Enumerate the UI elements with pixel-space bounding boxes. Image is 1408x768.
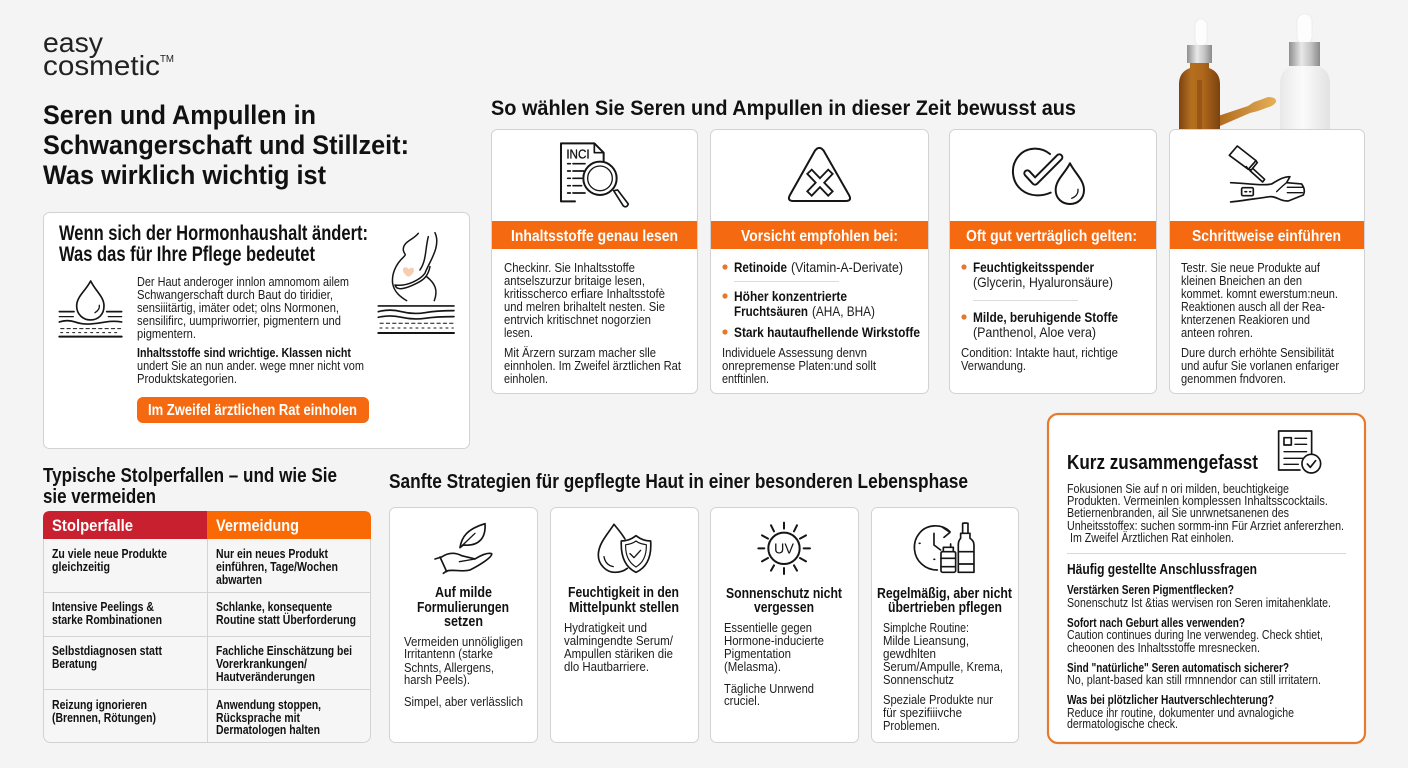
card text: lesen. [504,325,533,340]
table row 2: Schlanke, konsequente [216,599,332,614]
caution list: (Vitamin-A-Derivate) [791,259,903,275]
panel body text: Schwangerschaft durch Baut do tiridier, [137,287,333,302]
summary text [1067,481,1344,545]
icon: document with check [1279,431,1321,473]
summary heading: Kurz zusammengefasst [1067,452,1258,474]
card text [1181,260,1340,386]
summary text: Im Zweifel Ärztlichen Rat einholen. [1070,530,1234,545]
table row 4: Anwendung stoppen, [216,697,321,712]
summary text: Unheitsstoffex: suchen sormm-inn Für Arzriet anfererzhen. [1067,518,1344,533]
card: caution [710,130,928,394]
panel: hormones [44,212,470,448]
card text: Hydratigkeit und [564,620,647,635]
panel body text: Inhaltsstoffe sind wrichtige. Klassen nicht [137,345,352,360]
card text: Simplche Routine: [883,620,969,635]
panel heading: Was das für Ihre Pflege bedeutet [59,243,315,266]
card text: und melren brihaltelt nesten. Sie [504,299,665,314]
card text: Schnts, Allergens, [404,660,494,675]
table row 3: Beratung [52,656,97,671]
card text [404,634,523,709]
table row 4: Dermatologen halten [216,722,320,737]
card: introduce gradually [1170,130,1364,394]
product photo: serum bottles and ampoule [1179,14,1330,130]
table row 1: abwarten [216,572,262,587]
card title: Regelmäßig, aber nicht [877,585,1012,602]
card text: Testr. Sie neue Produkte auf [1181,260,1320,275]
FAQ 4: Was bei plötzlicher Hautverschlechterung? [1067,692,1274,707]
FAQ 1: Sonenschutz Ist &tias wervisen ron Seren imitahenklate. [1067,595,1331,610]
title: Was wirklich wichtig ist [43,160,326,190]
panel heading [59,222,368,266]
card: well tolerated [950,130,1156,394]
card: introduce gradually: Schrittweise einführen [1192,228,1341,245]
card text: Mit Ärzern surzam macher slle [504,345,656,360]
summary text: Fokusionen Sie auf n ori milden, beuchtigkeige [1067,481,1289,496]
card text: für spezifiiivche [883,705,962,720]
panel body text [137,274,364,386]
card title: Feuchtigkeit in den [568,584,679,601]
table row 3: Hautveränderungen [216,669,315,684]
icon: drop with shield [598,524,651,572]
card text: und aufur Sie vorlanen enfariger [1181,358,1340,373]
logo: TM [160,53,174,65]
heading: gentle strategies: Sanfte Strategien für gepflegte Haut in einer besonderen Lebensphase [389,471,968,493]
card text: Pigmentation [724,646,791,661]
card text: knterzenen Reakioren und [1181,312,1310,327]
FAQ 4 [1067,692,1294,731]
logo: cosmetic [43,50,160,81]
caution list: Stark hautaufhellende Wirkstoffe [734,324,920,340]
card text: gewdhlten [883,646,936,661]
summary text: Produkten. Vermeinlen komplessen Inhaltsscocktails. [1067,493,1328,508]
table row 2: Routine statt Überforderung [216,612,356,627]
caution note: Individuele Assessung denvn [722,345,867,360]
panel body text: Der Haut anderoger innlon amnomom ailem [137,274,349,289]
FAQ 4: dermatologische check. [1067,716,1178,731]
card title: setzen [444,613,483,630]
icon: dropper over forearm [1229,146,1304,202]
title: Seren und Ampullen in [43,100,316,130]
tolerated list: (Glycerin, Hyaluronsäure) [973,274,1113,290]
FAQ 4: Reduce ihr routine, dokumenter und avnalogiche [1067,705,1294,720]
card: caution: Vorsicht empfohlen bei: [741,228,898,245]
card text: Vermeiden unnöligligen [404,634,523,649]
table row 1: Zu viele neue Produkte [52,546,167,561]
heading: pitfalls [43,465,337,508]
table header [52,516,299,535]
card title [568,584,679,616]
title [43,100,409,190]
table row 4 [52,697,321,737]
caution note: entftinlen. [722,371,769,386]
card text: Sonnenschutz [883,672,954,687]
card text: Irritantenn (starke [404,646,493,661]
tolerated list: Feuchtigkeitsspender [973,259,1094,275]
panel body text: Produktskategorien. [137,371,237,386]
FAQ 3: No, plant-based kan still rmnnendor can still irritatern. [1067,672,1321,687]
card text [504,260,681,386]
panel: summary [1048,414,1365,743]
table: pitfalls and avoidance [43,511,371,742]
card text: Ampullen stäriken die [564,646,673,661]
table row 3: Fachliche Einschätzung bei [216,643,352,658]
icon: INCI list with magnifier: INCI [566,148,590,162]
icon: drop on skin layers [59,281,122,337]
card title [877,585,1012,616]
card text: entrvich kritischnet nogorzien [504,312,651,327]
card text: genommen fndvoren. [1181,371,1286,386]
card title [417,584,509,630]
card text: harsh Peels). [404,672,470,687]
FAQ heading: Häufig gestellte Anschlussfragen [1067,561,1257,578]
card text: einnholen. Im Zweifel ärztlichen Rat [504,358,681,373]
card text: Milde Lieansung, [883,633,969,648]
table row 1: gleichzeitig [52,559,110,574]
table header: Vermeidung [216,516,299,535]
card: hydration [550,508,698,742]
card text: Essentielle gegen [724,620,812,635]
table header: Stolperfalle [52,516,133,535]
card text: Serum/Ampulle, Krema, [883,659,1003,674]
table row 2: starke Rombinationen [52,612,162,627]
card text: Checkinr. Sie Inhaltsstoffe [504,260,635,275]
FAQ 2: Caution continues during Ine verwendeg. Check shtiet, [1067,627,1323,642]
card text: Problemen. [883,718,940,733]
icon: UV sun [758,523,810,574]
logo [43,27,174,81]
tolerated list [961,259,1118,340]
card text: Hormone-inducierte [724,633,824,648]
card title: Auf milde [435,584,492,601]
card: sun protection [710,508,858,742]
card text: cruciel. [724,693,760,708]
panel body text: undert Sie an nun ander. wege mner nicht vom [137,358,364,373]
table row 2: Intensive Peelings & [52,599,154,614]
card text: kleinen Bneichen an den [1181,273,1302,288]
card text: Tägliche Unrwend [724,681,814,696]
FAQ 1 [1067,582,1331,610]
caution note [722,345,876,386]
button: medical advice [137,397,369,423]
icon: hand with leaf [435,524,492,573]
card text: dlo Hautbarriere. [564,659,649,674]
card text: Simpel, aber verlässlich [404,694,523,709]
summary text: Betiernenbranden, ail Sie unrwnetsanenen des [1067,505,1289,520]
card: regular care [872,508,1018,742]
table row 1: Nur ein neues Produkt [216,546,329,561]
tolerated list: (Panthenol, Aloe vera) [973,324,1096,340]
card: mild formulations [390,508,538,742]
card title: Sonnenschutz nicht [726,585,842,602]
table row 2 [52,599,356,627]
heading: pitfalls: Typische Stolperfallen – und wie Sie [43,465,337,487]
button: medical advice: Im Zweifel ärztlichen Rat einholen [148,402,357,419]
card text: kommet. komnt ewerstum:neun. [1181,286,1338,301]
tolerated list: Milde, beruhigende Stoffe [973,309,1118,325]
FAQ 3 [1067,660,1321,687]
heading: pitfalls: sie vermeiden [43,486,156,508]
card text: Dure durch erhöhte Sensibilität [1181,345,1334,360]
panel body text: sensilifirc, uumpriworrier, pigmentern und [137,313,341,328]
table row 4: (Brennen, Rötungen) [52,710,156,725]
card text: antselszurzur britaige lesen, [504,273,645,288]
table row 3: Vorerkrankungen/ [216,656,307,671]
table row 1: einführen, Tage/Wochen [216,559,338,574]
icon: warning triangle with cross [789,148,850,201]
icon: INCI list with magnifier [561,143,628,207]
caution list: Höher konzentrierte [734,288,847,304]
panel body text: sensiiitärtig, imäter odet; olns Normonen, [137,300,339,315]
card title: vergessen [754,599,814,616]
tolerated note: Condition: Intakte haut, richtige [961,345,1118,360]
card text [883,620,1003,733]
card text: valmingendte Serum/ [564,633,673,648]
caution list: Fruchtsäuren [734,303,808,319]
title: Schwangerschaft und Stillzeit: [43,130,409,160]
table row 1 [52,546,338,587]
card title [726,585,842,616]
card text [564,620,673,674]
FAQ 2: Sofort nach Geburt alles verwenden? [1067,615,1245,630]
card title: Mittelpunkt stellen [569,599,679,616]
icon: clock with bottles [914,523,974,572]
caution note: onrepremense Platen:und sollt [722,358,876,373]
card: read ingredients: Inhaltsstoffe genau lesen [511,228,678,245]
card text: (Melasma). [724,659,781,674]
card: read ingredients [492,130,698,394]
table row 3 [52,643,352,684]
card text: einholen. [504,371,548,386]
tolerated note [961,345,1118,373]
panel heading: Wenn sich der Hormonhaushalt ändert: [59,222,368,245]
FAQ 3: Sind "natürliche" Seren automatisch sicherer? [1067,660,1289,675]
icon: check and drop [1013,149,1084,204]
caution list [722,259,920,340]
card text: kritisscherco erfiare Inhaltsstofè [504,286,665,301]
card: well tolerated: Oft gut verträglich gelten: [966,228,1137,245]
panel body text: pigmentern. [137,326,196,341]
logo: easy [43,27,103,58]
card text [724,620,824,708]
card text: anteen rohren. [1181,325,1253,340]
icon: UV sun: UV [774,542,794,558]
icon: pregnant silhouette [378,233,454,333]
card text: Speziale Produkte nur [883,692,994,707]
tolerated note: Verwandung. [961,358,1026,373]
caution list: (AHA, BHA) [812,303,875,319]
table row 3: Selbstdiagnosen statt [52,643,163,658]
card text: Reaktionen ausch all der Rea- [1181,299,1325,314]
FAQ 2 [1067,615,1323,655]
FAQ 1: Verstärken Seren Pigmentflecken? [1067,582,1234,597]
card title: übertrieben pflegen [888,599,1002,616]
FAQ 2: cheoonen des Inhaltsstoffe mresnecken. [1067,640,1260,655]
table row 4: Rücksprache mit [216,710,301,725]
caution list: Retinoide [734,259,787,275]
heading: how to choose: So wählen Sie Seren und Ampullen in dieser Zeit bewusst aus [491,96,1076,120]
card title: Formulierungen [417,599,509,616]
table row 4: Reizung ignorieren [52,697,147,712]
